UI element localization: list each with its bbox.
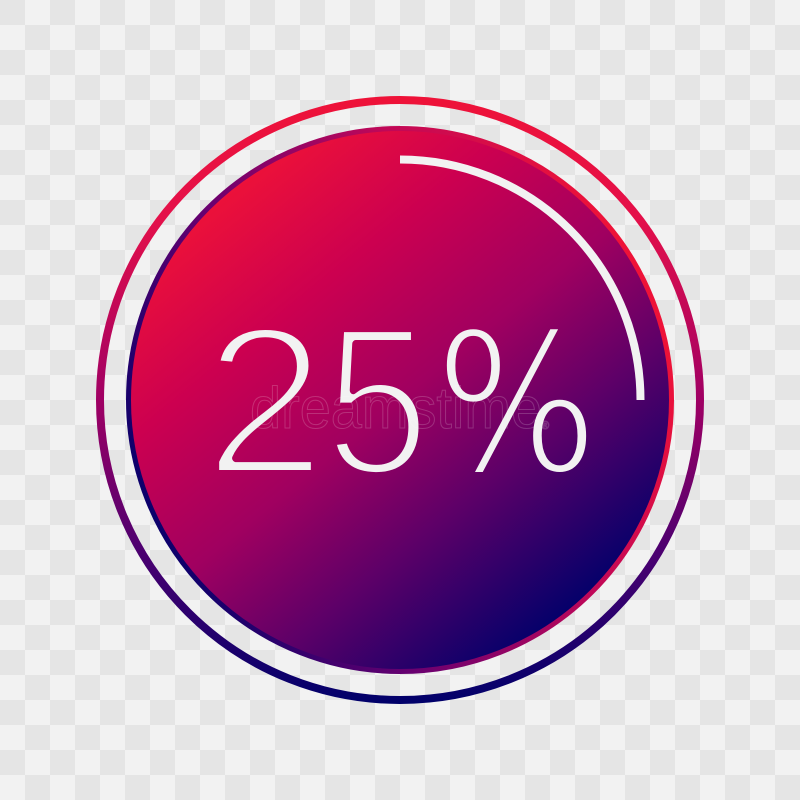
- outer gradient ring: [100, 100, 700, 700]
- progress arc: 25 percent: [400, 160, 640, 400]
- percentage value: 25%: 5: [325, 282, 430, 519]
- percentage value: 25%: [204, 282, 598, 519]
- percentage value: 25%: %: [435, 291, 598, 519]
- disc edge stroke: [128, 128, 672, 672]
- watermark: dreamstime: [250, 376, 542, 441]
- disc fill: [126, 126, 674, 674]
- gradient disc panel: [126, 126, 674, 674]
- watermark: ®: [541, 420, 549, 432]
- percentage value: 25%: 2: [204, 282, 326, 519]
